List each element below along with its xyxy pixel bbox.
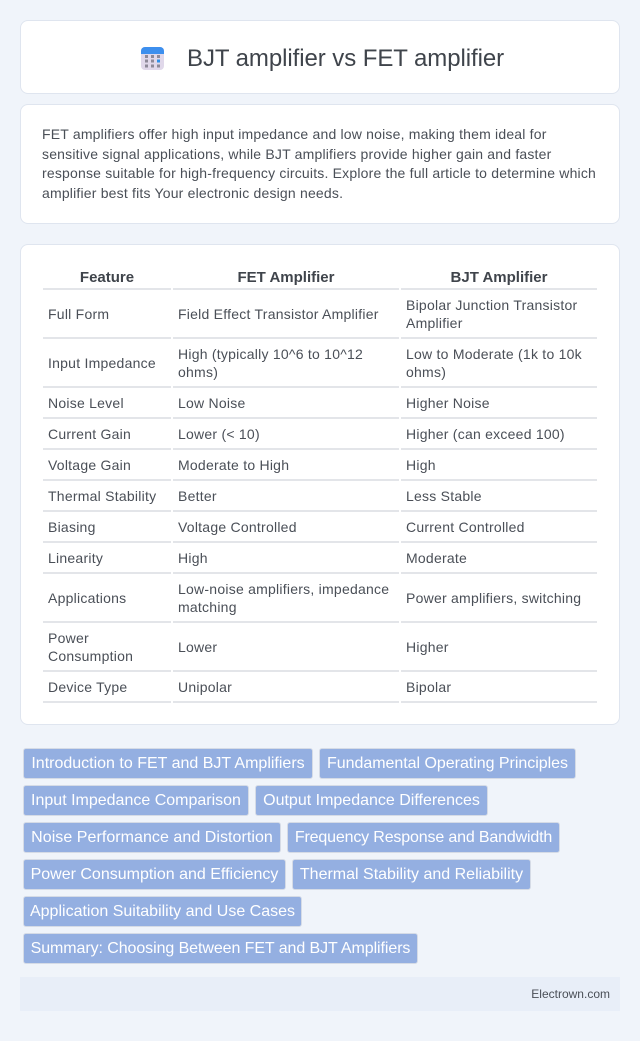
row: device type: Unipolar [178,679,232,695]
row: voltage gain [48,457,436,473]
tag: power consumption [23,859,286,890]
row: linearity [48,550,467,566]
tag: noise performance [23,822,281,853]
comparison table card [20,244,620,725]
row: device type: Device Type [48,679,127,695]
row: input impedance: Low to Moderate (1k to 10k [406,346,582,362]
row: input impedance: ohms) [178,364,218,380]
row: noise level: Higher Noise [406,395,490,411]
table header [80,269,548,286]
row: noise level: Low Noise [178,395,246,411]
tag: frequency response: Frequency Response and Bandwidth [295,829,552,846]
tag: input impedance: Input Impedance Comparison [31,792,241,809]
tag: power consumption: Power Consumption and Efficiency [31,866,278,883]
row: power consumption: Power [48,630,89,646]
row: applications: Applications [48,590,126,606]
table header: Feature [80,269,134,286]
intro text: FET amplifiers offer high input impedance and low noise, making them ideal for [42,126,547,142]
intro text: amplifier best fits Your electronic design needs. [42,184,343,200]
tag: introduction [23,748,313,779]
row: biasing: Current Controlled [406,519,525,535]
row: full form: Amplifier [406,315,463,331]
row: thermal stability: Thermal Stability [48,488,156,504]
row: biasing: Biasing [48,519,96,535]
row: noise level: Noise Level [48,395,124,411]
intro card [20,104,620,224]
row: input impedance: ohms) [406,364,446,380]
row: power consumption [48,630,449,664]
row: biasing [48,519,525,535]
table header: BJT Amplifier [451,269,547,286]
row: input impedance [48,346,582,380]
tag: noise performance: Noise Performance and Distortion [31,829,273,846]
tag: introduction: Introduction to FET and BJT Amplifiers [31,755,305,772]
row: voltage gain: Moderate to High [178,457,289,473]
tag: output impedance: Output Impedance Differences [263,792,480,809]
row: noise level [48,395,490,411]
row: thermal stability: Less Stable [406,488,482,504]
row: input impedance: High (typically 10^6 to 10^12 [178,346,363,362]
intro text: sensitive signal applications, while BJT amplifiers provide higher gain and faster [42,146,551,162]
row: full form: Bipolar Junction Transistor [406,297,577,313]
row: applications: Low-noise amplifiers, impedance [178,581,389,597]
row: full form: Field Effect Transistor Amplifier [178,306,379,322]
row: voltage gain: Voltage Gain [48,457,131,473]
row: current gain: Current Gain [48,426,131,442]
tag: input impedance [23,785,249,816]
intro text [42,126,596,201]
row: input impedance: Input Impedance [48,355,156,371]
row: linearity: Linearity [48,550,103,566]
row: applications: matching [178,599,237,615]
row: current gain: Lower (< 10) [178,426,260,442]
tag: output impedance [255,785,488,816]
row: biasing: Voltage Controlled [178,519,297,535]
title: BJT amplifier vs FET amplifier [187,45,504,72]
header card [20,20,620,94]
row: device type: Bipolar [406,679,451,695]
tag: summary [23,933,418,964]
table header: FET Amplifier [238,269,334,286]
intro text: response suitable for high-frequency circuits. Explore the full article to determine which [42,165,596,181]
row: full form [48,297,577,331]
row: thermal stability [48,488,482,504]
row: voltage gain: High [406,457,436,473]
row: applications [48,581,581,615]
tag: summary: Summary: Choosing Between FET and BJT Amplifiers [31,940,410,957]
row: linearity: Moderate [406,550,467,566]
row: applications: Power amplifiers, switching [406,590,581,606]
row: thermal stability: Better [178,488,217,504]
footer bar [20,977,620,1011]
tag: frequency response [287,822,560,853]
tag: thermal stability: Thermal Stability and Reliability [300,866,523,883]
icon: calendar [141,47,164,70]
row: device type [48,679,451,695]
tag: fundamental principles: Fundamental Operating Principles [327,755,568,772]
row: full form: Full Form [48,306,109,322]
footer credit: Electrown.com [531,987,610,1001]
row: power consumption: Lower [178,639,217,655]
row: power consumption: Higher [406,639,449,655]
row: current gain: Higher (can exceed 100) [406,426,565,442]
row: power consumption: Consumption [48,648,133,664]
tag: fundamental principles [319,748,576,779]
tag: thermal stability [292,859,531,890]
tag: application suitability: Application Suitability and Use Cases [30,903,295,920]
tag: application suitability [23,896,302,927]
row: linearity: High [178,550,208,566]
row: current gain [48,426,565,442]
